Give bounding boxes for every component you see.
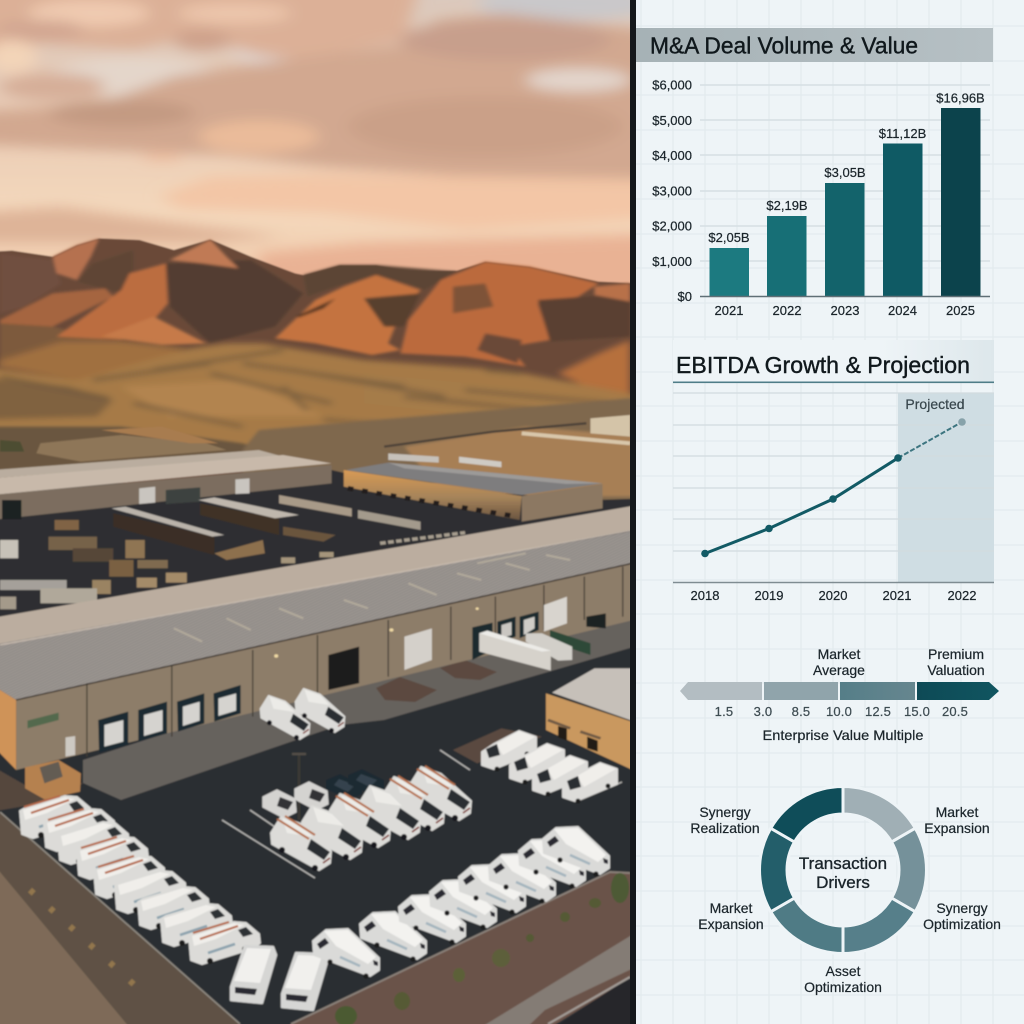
segment labels: Realization bbox=[690, 820, 760, 836]
tick values: 1.5 bbox=[715, 704, 733, 719]
segment labels bbox=[690, 804, 1001, 995]
y axis labels: $2,000 bbox=[652, 218, 692, 234]
scale captions bbox=[813, 646, 985, 678]
asphalt lot bbox=[0, 470, 647, 687]
x axis years: 2022 bbox=[948, 588, 976, 603]
y axis labels: $3,000 bbox=[652, 184, 692, 198]
yard sheds and pallets bbox=[0, 495, 465, 609]
tick values: 3.0 bbox=[754, 704, 772, 719]
arrow bar segments bbox=[680, 682, 999, 700]
bar value labels: $2,19B bbox=[766, 198, 808, 213]
parking stripes and light pole bbox=[222, 750, 622, 878]
x axis years: 2024 bbox=[888, 303, 917, 318]
segment labels: Market bbox=[710, 900, 752, 916]
x axis years: 2021 bbox=[715, 303, 743, 318]
mountains bbox=[0, 238, 647, 507]
bar chart: deal volume and value bbox=[652, 78, 990, 318]
bar value labels: $16,96B bbox=[936, 90, 985, 106]
heading: M&A Deal Volume & Value: M&A Deal Volume & Value bbox=[650, 32, 918, 58]
x axis years: 2021 bbox=[883, 588, 911, 603]
semi trailers bbox=[479, 630, 590, 671]
center label bbox=[799, 854, 887, 892]
y axis labels bbox=[652, 78, 692, 304]
lower ground and concrete apron bbox=[0, 600, 640, 1024]
projected dashed line bbox=[898, 422, 962, 458]
line chart: EBITDA growth and projection bbox=[673, 393, 994, 603]
y axis labels: $1,000 bbox=[652, 254, 692, 269]
y axis labels: $5,000 bbox=[652, 113, 692, 128]
x axis years: 2023 bbox=[831, 303, 859, 318]
segment labels: Synergy bbox=[936, 900, 988, 916]
donut chart: transaction drivers bbox=[690, 786, 1001, 995]
scale captions: Average bbox=[813, 662, 865, 678]
x axis years: 2020 bbox=[819, 588, 847, 603]
main warehouse bbox=[0, 503, 647, 770]
heading: EBITDA Growth & Projection bbox=[673, 340, 994, 383]
scale captions: Premium bbox=[928, 646, 984, 662]
donut segments bbox=[760, 786, 926, 954]
segment labels: Expansion bbox=[924, 820, 990, 836]
scale: enterprise value multiple bbox=[680, 646, 999, 743]
bar value labels: $3,05B bbox=[824, 165, 866, 180]
segment labels: Optimization bbox=[804, 979, 882, 995]
bar value labels bbox=[708, 90, 985, 245]
y axis labels: $6,000 bbox=[652, 78, 692, 92]
x axis years: 2022 bbox=[773, 303, 801, 318]
center label: Transaction bbox=[799, 854, 887, 873]
tick values: 12.5 bbox=[865, 704, 891, 719]
tick values: 20.5 bbox=[942, 704, 968, 719]
tick values bbox=[715, 704, 968, 719]
small corner building bbox=[453, 668, 647, 777]
x axis years: 2018 bbox=[691, 588, 719, 603]
x axis years bbox=[715, 303, 975, 318]
panel: charts background with grid bbox=[636, 0, 1024, 1024]
scale captions: Valuation bbox=[927, 662, 985, 678]
divider strip bbox=[630, 0, 636, 1024]
sky with sunset clouds bbox=[0, 0, 687, 300]
fleet of white service vans bbox=[20, 689, 617, 1010]
segment labels: Optimization bbox=[923, 916, 1001, 932]
heading: M&A Deal Volume & Value bbox=[636, 28, 993, 62]
bar value labels: $11,12B bbox=[879, 126, 926, 141]
x axis years: 2019 bbox=[755, 588, 783, 603]
tick values: 10.0 bbox=[826, 704, 852, 719]
panel: aerial photo of industrial site bbox=[0, 0, 687, 1024]
left dock doors bbox=[25, 685, 241, 799]
segment labels: Synergy bbox=[699, 804, 751, 820]
x axis years: 2025 bbox=[946, 303, 975, 318]
scale captions: Market bbox=[818, 646, 860, 662]
data points bbox=[701, 418, 966, 557]
tick values: 8.5 bbox=[792, 704, 810, 719]
segment labels: Asset bbox=[825, 963, 861, 979]
y axis labels: $4,000 bbox=[652, 148, 692, 163]
segment labels: Market bbox=[936, 804, 978, 820]
projected label: Projected bbox=[905, 396, 965, 412]
upper warehouses bbox=[0, 450, 603, 522]
segment labels: Expansion bbox=[698, 916, 764, 932]
axis title: Enterprise Value Multiple bbox=[762, 727, 924, 743]
heading: EBITDA Growth & Projection: EBITDA Growth & Projection bbox=[676, 352, 970, 378]
y axis labels: $0 bbox=[678, 289, 692, 304]
bars bbox=[710, 108, 980, 296]
tick values: 15.0 bbox=[904, 704, 930, 719]
center label: Drivers bbox=[816, 873, 870, 892]
actual trend line bbox=[705, 458, 898, 554]
x axis years bbox=[691, 588, 976, 603]
bar value labels: $2,05B bbox=[708, 230, 750, 245]
